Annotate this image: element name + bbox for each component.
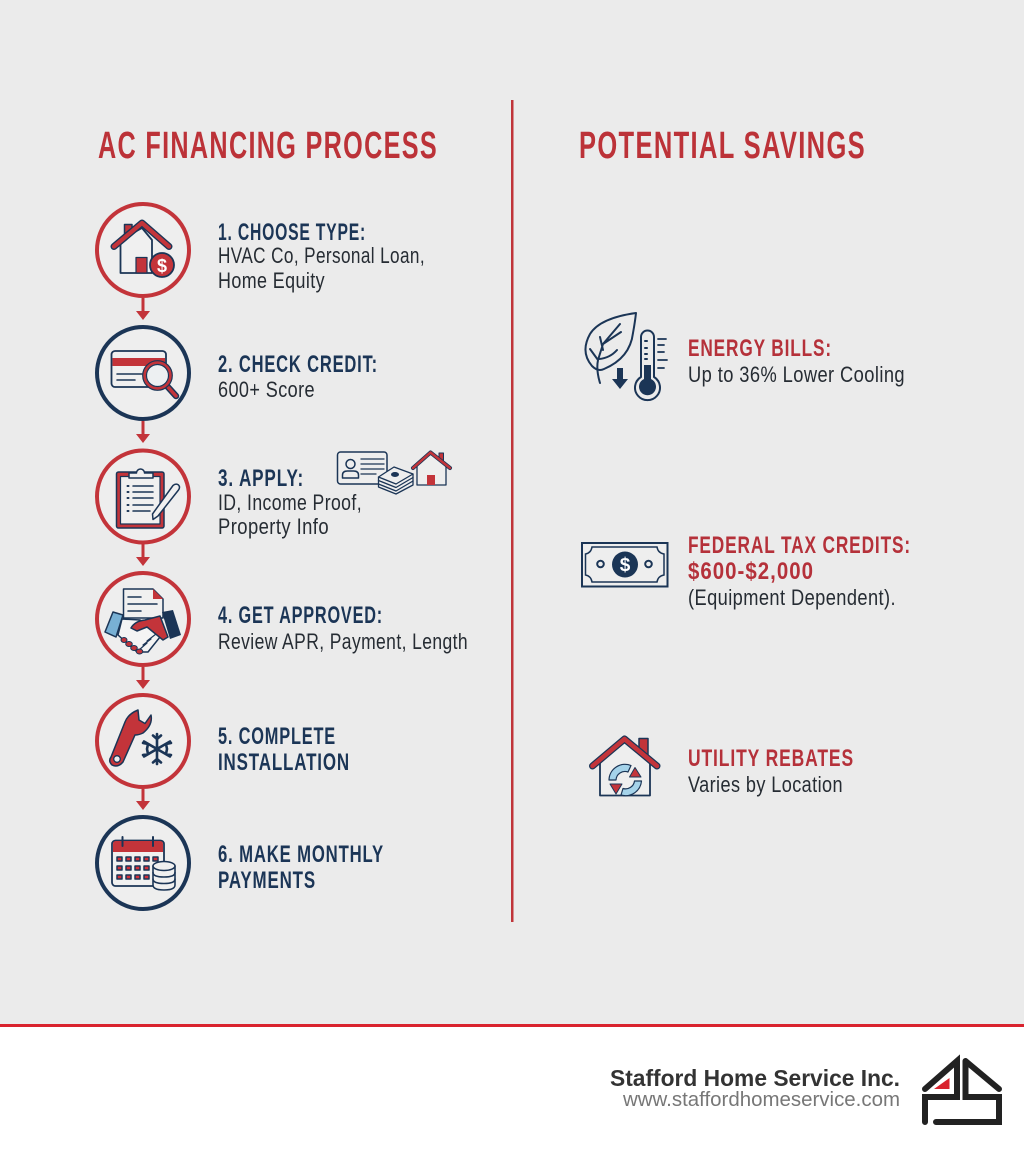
- icon: credit card with magnifier: [97, 327, 189, 419]
- text: energy bills: [688, 335, 905, 387]
- text: step 3: ID, Income Proof,: [218, 490, 362, 515]
- text: step 5: 5. COMPLETE: [218, 723, 336, 750]
- icon: dollar bill: [582, 543, 668, 586]
- text: step 1: Home Equity: [218, 268, 325, 293]
- text: step 2: 2. CHECK CREDIT:: [218, 351, 378, 378]
- text: step 1: HVAC Co, Personal Loan,: [218, 243, 425, 268]
- arrow: step 1 to 2: [136, 298, 150, 320]
- text: step 2: [218, 351, 378, 402]
- icon: dollar bill: $: [620, 555, 631, 576]
- arrow: step 5 to 6: [136, 789, 150, 810]
- title: potential savings: POTENTIAL SAVINGS: [579, 125, 866, 167]
- text: step 3: Property Info: [218, 514, 329, 539]
- text: utility rebates: [688, 745, 854, 797]
- icon: clipboard and pen: [97, 450, 189, 542]
- icon: ID card, cash and house: [338, 452, 450, 494]
- panel: potential savings: [579, 125, 911, 797]
- step 1: choose type: [97, 204, 425, 320]
- icon: calendar and coins: [97, 817, 189, 909]
- saving: federal tax credits: [582, 532, 911, 610]
- arrow: step 3 to 4: [136, 544, 150, 566]
- footer: [0, 1024, 1024, 1154]
- text: utility rebates: UTILITY REBATES: [688, 745, 854, 772]
- text: federal tax credits: (Equipment Dependent).: [688, 585, 896, 610]
- icon: house with dollar coin: [97, 204, 189, 296]
- saving: utility rebates: [592, 738, 854, 797]
- icon: house with dollar coin: $: [157, 256, 167, 276]
- text: step 1: 1. CHOOSE TYPE:: [218, 219, 366, 246]
- icon: document and handshake: [97, 573, 189, 665]
- text: step 4: [218, 602, 468, 654]
- website: www.staffordhomeservice.com: [622, 1089, 900, 1111]
- text: step 6: [218, 841, 384, 894]
- text: step 1: [218, 219, 425, 293]
- text: step 6: PAYMENTS: [218, 867, 316, 894]
- step 3: apply: [97, 450, 450, 566]
- step 6: make monthly payments: [97, 817, 384, 909]
- text: step 3: [218, 465, 362, 539]
- panel: AC financing process: [97, 125, 468, 909]
- text: federal tax credits: $600-$2,000: [688, 558, 814, 585]
- text: federal tax credits: [688, 532, 911, 610]
- center divider: [511, 100, 514, 922]
- icon: house with rebate arrows: [592, 738, 657, 796]
- step 2: check credit: [97, 327, 378, 443]
- text: energy bills: Up to 36% Lower Cooling: [688, 362, 905, 387]
- text: step 4: 4. GET APPROVED:: [218, 602, 383, 629]
- arrow: step 2 to 3: [136, 421, 150, 443]
- title: AC financing process: AC FINANCING PROCESS: [98, 125, 438, 167]
- text: utility rebates: Varies by Location: [688, 772, 843, 797]
- logo: [925, 1061, 999, 1122]
- text: step 6: 6. MAKE MONTHLY: [218, 841, 384, 868]
- text: step 5: INSTALLATION: [218, 749, 350, 776]
- saving: energy bills: [585, 313, 905, 400]
- icon: wrench and snowflake: [97, 695, 189, 787]
- arrow: step 4 to 5: [136, 667, 150, 689]
- icon: leaf, down arrow and thermometer: [585, 313, 667, 400]
- text: energy bills: ENERGY BILLS:: [688, 335, 832, 362]
- text: step 2: 600+ Score: [218, 377, 315, 402]
- text: federal tax credits: FEDERAL TAX CREDITS:: [688, 532, 911, 559]
- company name: Stafford Home Service Inc.: [610, 1065, 900, 1091]
- text: step 4: Review APR, Payment, Length: [218, 629, 468, 654]
- step 5: complete installation: [97, 695, 350, 810]
- text: step 3: 3. APPLY:: [218, 465, 304, 492]
- step 4: get approved: [97, 573, 468, 689]
- text: step 5: [218, 723, 350, 776]
